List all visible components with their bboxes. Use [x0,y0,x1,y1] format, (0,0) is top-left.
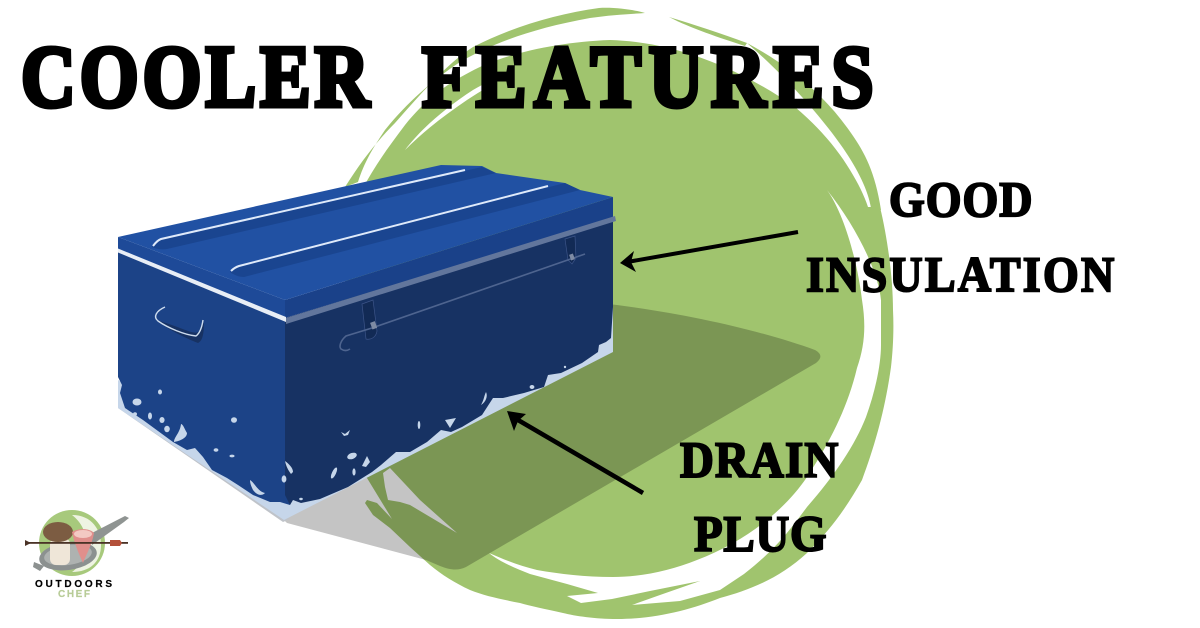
arrow to base: drain plug [507,411,643,493]
grey rim [286,216,616,324]
label: good insulation: GOOD [889,172,1033,227]
lid ridge 1 [152,167,496,249]
title: COOLER [21,28,370,125]
left face [118,250,290,505]
cast shadow [200,303,820,570]
right face [285,217,613,505]
arrow to lid: good insulation [620,232,798,272]
green brush circle [339,8,893,619]
ridge highlights [153,170,548,271]
label: drain plug: DRAIN [680,431,838,488]
lid left band [118,237,285,318]
title [21,28,874,125]
label: good insulation [806,172,1114,302]
title: FEATURES [422,28,874,125]
left handle [156,307,204,343]
logo: outdoors chef: OUTDOORS [35,579,112,590]
label: good insulation: INSULATION [806,247,1114,302]
white rim [118,248,286,322]
lid top [118,165,613,300]
label: drain plug: PLUG [694,505,826,562]
lid ridge 2 [230,183,580,277]
lid right band [285,197,613,318]
label: drain plug [680,431,838,562]
cooler box [118,165,616,522]
base [118,404,290,522]
logo: outdoors chef [25,510,129,600]
logo: outdoors chef: CHEF [58,589,90,600]
foam splashes [132,366,566,500]
latches and rod [340,236,585,350]
